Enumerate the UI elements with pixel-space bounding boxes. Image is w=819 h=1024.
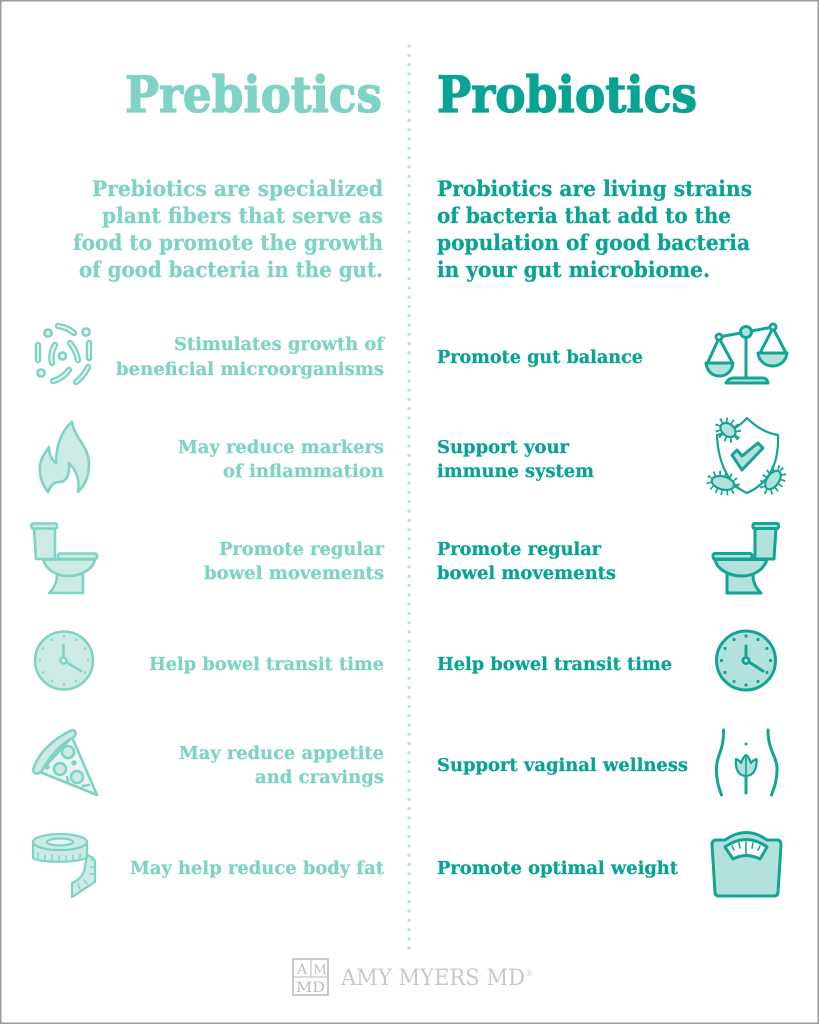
text: optimal weight: Promote optimal weight [437,859,678,879]
text block: probiotics definition: population of good bacteria [437,230,750,255]
icon: shield with bacteria [707,416,787,496]
text: regular bowel movements [437,540,616,584]
text: reduce inflammation: of inflammation [223,462,384,482]
text: vaginal wellness: Support vaginal wellness [437,756,688,776]
text: immune system: immune system [437,462,594,482]
text: reduce appetite: May reduce appetite [179,744,384,764]
text: reduce appetite [179,744,384,788]
icon: vaginal wellness [716,730,777,795]
text block: probiotics definition: of bacteria that add to the [437,203,731,228]
text block: prebiotics definition: Prebiotics are specialized [92,176,383,201]
logo mark: AM MD: M [313,963,327,978]
text: bowel transit time: Help bowel transit time [149,655,384,675]
text: reduce inflammation [178,438,384,482]
text: reduce body fat: May help reduce body fat [130,859,384,879]
icon: toilet [713,524,778,593]
icon: clock [35,632,93,690]
text: regular bowel movements [204,540,385,584]
panel: probiotics [437,65,752,879]
text: stimulates growth [116,335,385,380]
logo mark: AM MD: MD [296,980,325,996]
text: stimulates growth: beneficial microorganisms [116,360,384,380]
text: bowel transit time: Help bowel transit time [437,655,672,675]
text block: probiotics definition: Probiotics are living strains [437,176,752,201]
panel: prebiotics [73,65,385,879]
heading: Prebiotics: Prebiotics [125,65,382,124]
text block: prebiotics definition: food to promote the growth [73,230,383,255]
icon: flame [40,422,89,492]
text: regular bowel movements: bowel movements [437,564,616,584]
icon: pizza [33,730,97,795]
logo wordmark: AMY MYERS MD [340,966,525,991]
icon: microorganisms [37,326,90,382]
text block: probiotics definition [437,176,752,282]
text: regular bowel movements: Promote regular [437,540,602,560]
logo mark: AM MD [293,959,328,996]
icon: measuring tape [33,834,95,897]
text block: probiotics definition: in your gut microbiome. [437,257,710,282]
text block: prebiotics definition [73,176,383,282]
text: regular bowel movements: Promote regular [219,540,385,560]
text: immune system: Support your [437,438,570,458]
icon: toilet [32,524,97,593]
registered mark: ® [526,968,533,978]
text: stimulates growth: Stimulates growth of [174,335,385,355]
icon: balance scale [706,324,787,383]
text: immune system [437,438,594,482]
icon: clock [716,631,776,690]
icon: weighing scale [712,832,781,896]
text: reduce appetite: and cravings [255,768,384,788]
text: reduce inflammation: May reduce markers [178,438,384,458]
heading: Probiotics: Probiotics [437,65,697,124]
text block: prebiotics definition: plant fibers that serve as [102,203,383,228]
text block: prebiotics definition: of good bacteria in the gut. [79,257,383,282]
logo mark: AM MD: A [296,962,308,978]
text: gut balance: Promote gut balance [437,348,643,368]
text: regular bowel movements: bowel movements [204,564,384,584]
footer logo [293,959,533,996]
